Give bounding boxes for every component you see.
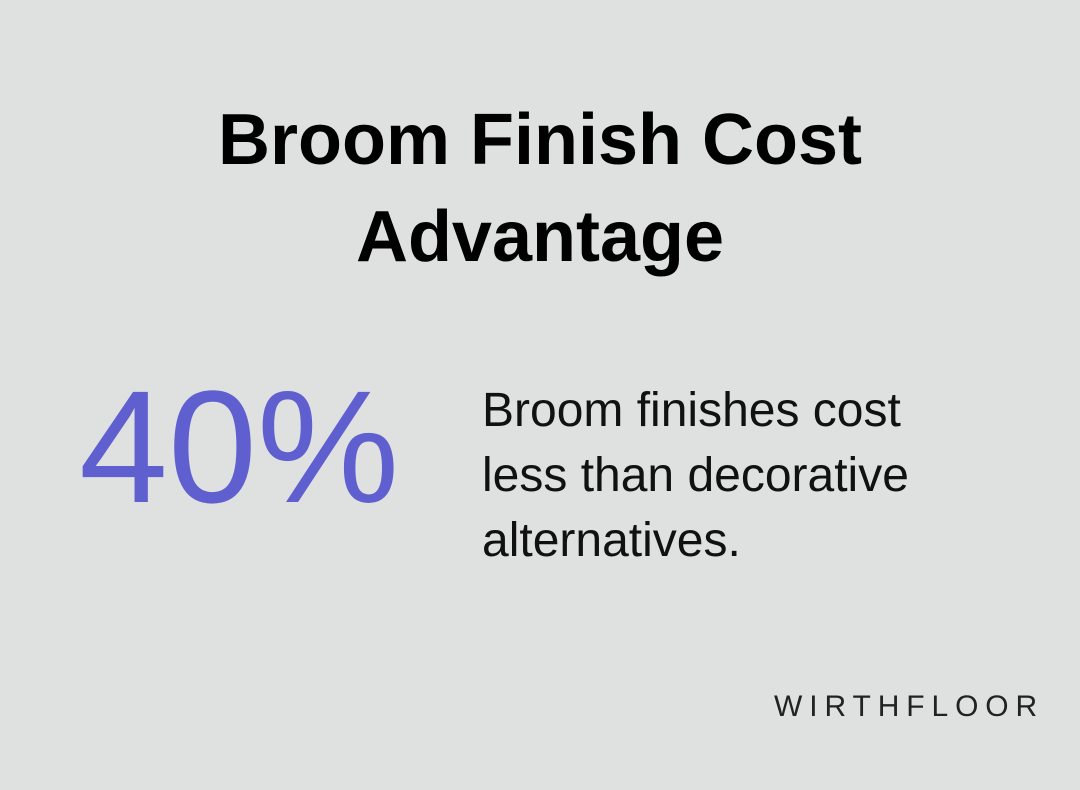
stat number: 40% xyxy=(79,357,399,536)
description text xyxy=(482,384,909,567)
title: Broom Finish Cost xyxy=(218,100,862,180)
title: Advantage xyxy=(356,197,724,277)
title xyxy=(218,100,862,277)
description text: less than decorative xyxy=(482,449,909,502)
description text: alternatives. xyxy=(482,514,741,567)
description text: Broom finishes cost xyxy=(482,384,901,437)
brand logo: WIRTHFLOOR xyxy=(774,690,1044,723)
